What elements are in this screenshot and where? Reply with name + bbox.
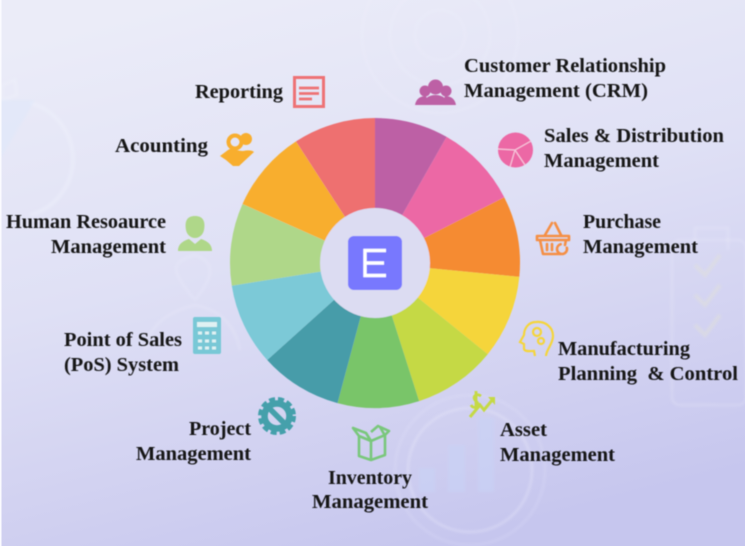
segment: point of sales	[232, 263, 375, 360]
icon: crm people	[415, 80, 456, 105]
label: asset: Management	[500, 445, 616, 466]
left edge strip	[0, 0, 2, 546]
icon: sales pie	[498, 132, 533, 168]
label: asset: Asset	[500, 420, 548, 441]
label: manufacturing: Manufacturing	[558, 339, 690, 360]
icon: inventory box	[353, 426, 389, 460]
label: human resources	[6, 212, 167, 258]
label: project: Project	[189, 419, 252, 440]
segment: human resources	[230, 204, 375, 286]
label: CRM	[464, 56, 666, 102]
wheel centre	[320, 208, 430, 318]
segment: CRM	[375, 118, 447, 263]
label: point of sales: Point of Sales	[64, 330, 182, 351]
segment: project	[267, 263, 375, 403]
label: sales and distribution: Management	[544, 151, 660, 172]
segment: sales	[375, 137, 504, 263]
label: sales and distribution	[544, 126, 724, 172]
logo	[348, 236, 402, 290]
label: human resources: Human Resoaurce	[6, 212, 166, 233]
segment: accounting	[242, 141, 375, 263]
icon: purchase basket	[537, 223, 569, 254]
label: project	[136, 419, 252, 465]
label: purchase	[583, 212, 699, 258]
label: CRM: Management (CRM)	[464, 81, 648, 102]
segment: asset	[375, 263, 488, 401]
label: purchase: Management	[583, 237, 699, 258]
label: sales and distribution: Sales & Distribution	[544, 126, 724, 147]
label: point of sales: (PoS) System	[64, 355, 179, 376]
segment: manufacturing	[375, 263, 519, 354]
icon: manufacturing head	[520, 322, 553, 356]
label: manufacturing: Planning & Control	[558, 364, 739, 385]
wheel	[230, 118, 520, 408]
background bar chart	[419, 418, 494, 492]
icon: accounting	[220, 133, 254, 166]
icon: asset growth	[470, 391, 495, 417]
icon: project gear	[260, 399, 294, 433]
label: project: Management	[136, 444, 252, 465]
label: inventory: Management	[312, 492, 429, 513]
label: inventory	[312, 468, 429, 513]
label: asset	[500, 420, 616, 466]
label: reporting: Reporting	[195, 82, 283, 103]
segment: inventory	[338, 263, 419, 408]
segment: purchase	[375, 197, 520, 277]
label: purchase: Purchase	[583, 212, 661, 233]
icon: reporting	[294, 78, 324, 106]
label: CRM: Customer Relationship	[464, 56, 666, 77]
label: manufacturing	[558, 339, 739, 385]
segment: reporting	[296, 118, 375, 263]
label: inventory: Inventory	[328, 468, 412, 489]
label: accounting: Acounting	[115, 136, 208, 157]
icon: human resources person	[178, 216, 212, 251]
label: human resources: Management	[51, 237, 167, 258]
label: point of sales	[64, 330, 182, 376]
icon: calculator	[193, 317, 221, 354]
